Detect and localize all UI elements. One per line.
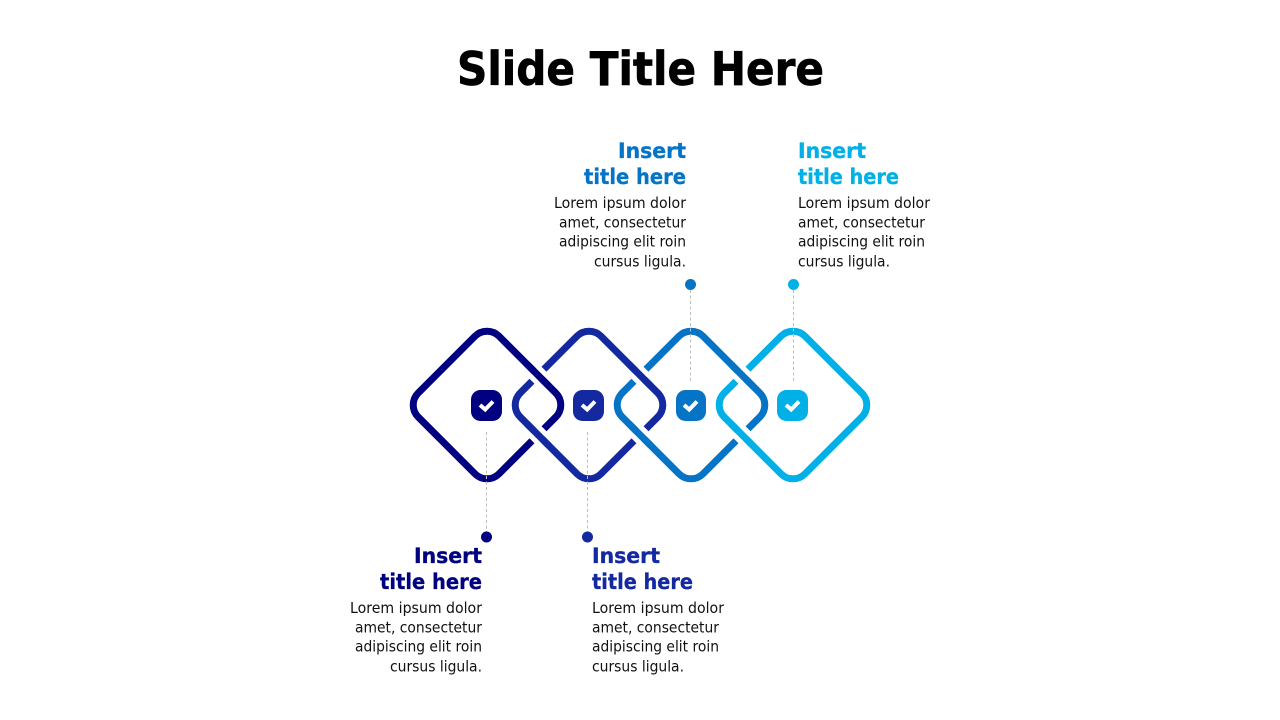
icon: check badge 1 <box>471 390 502 421</box>
text block 4 (top, left aligned) <box>798 139 931 270</box>
text block 1 (bottom, right aligned) <box>350 544 483 676</box>
text block 3 (top, right aligned): adipiscing elit roin <box>559 232 686 250</box>
icon: check badge 3 <box>676 390 706 421</box>
text block 1 (bottom, right aligned): title here <box>380 570 482 594</box>
weave crossing 2-3 <box>629 364 651 446</box>
text block 1 (bottom, right aligned): Insert <box>414 544 482 568</box>
text block 4 (top, left aligned): Insert <box>798 139 866 163</box>
connector 4 <box>788 279 799 382</box>
text block 1 (bottom, right aligned): Lorem ipsum dolor <box>350 599 483 617</box>
text block 1 (bottom, right aligned): amet, consectetur <box>355 618 483 636</box>
weave crossing 3-4 <box>731 364 753 446</box>
text block 2 (bottom, left aligned): cursus ligula. <box>592 658 684 676</box>
text block 1 (bottom, right aligned): adipiscing elit roin <box>355 638 482 656</box>
text block 4 (top, left aligned): amet, consectetur <box>798 214 926 232</box>
icon: check badge 2 <box>573 390 604 421</box>
text block 2 (bottom, left aligned): amet, consectetur <box>592 618 720 636</box>
text block 2 (bottom, left aligned): Lorem ipsum dolor <box>592 599 725 617</box>
text block 3 (top, right aligned): cursus ligula. <box>594 252 686 270</box>
text block 3 (top, right aligned): Lorem ipsum dolor <box>554 194 687 212</box>
linked diamond chain <box>406 324 874 486</box>
text block 2 (bottom, left aligned): Insert <box>592 544 660 568</box>
text block 3 (top, right aligned) <box>554 139 687 270</box>
text block 2 (bottom, left aligned): adipiscing elit roin <box>592 638 719 656</box>
diamond ring 2 <box>508 324 670 486</box>
diamond ring 1 <box>406 324 568 486</box>
diamond ring 3 <box>610 324 772 486</box>
text block 2 (bottom, left aligned): title here <box>592 570 693 594</box>
text block 1 (bottom, right aligned): cursus ligula. <box>390 658 482 676</box>
text block 3 (top, right aligned): title here <box>584 165 686 189</box>
text block 4 (top, left aligned): adipiscing elit roin <box>798 232 925 250</box>
icon: check badge 4 <box>777 390 808 421</box>
diamond ring 4 <box>712 324 874 486</box>
connector 1 <box>481 432 492 542</box>
text block 3 (top, right aligned): amet, consectetur <box>559 214 687 232</box>
text block 4 (top, left aligned): title here <box>798 165 899 189</box>
text block 4 (top, left aligned): cursus ligula. <box>798 252 890 270</box>
connector 3 <box>685 279 696 382</box>
weave crossing 1-2 <box>527 364 549 446</box>
connector 2 <box>582 432 593 542</box>
text block 2 (bottom, left aligned) <box>592 544 725 676</box>
text block 3 (top, right aligned): Insert <box>618 139 686 163</box>
title: Slide Title Here <box>457 42 824 96</box>
text block 4 (top, left aligned): Lorem ipsum dolor <box>798 194 931 212</box>
